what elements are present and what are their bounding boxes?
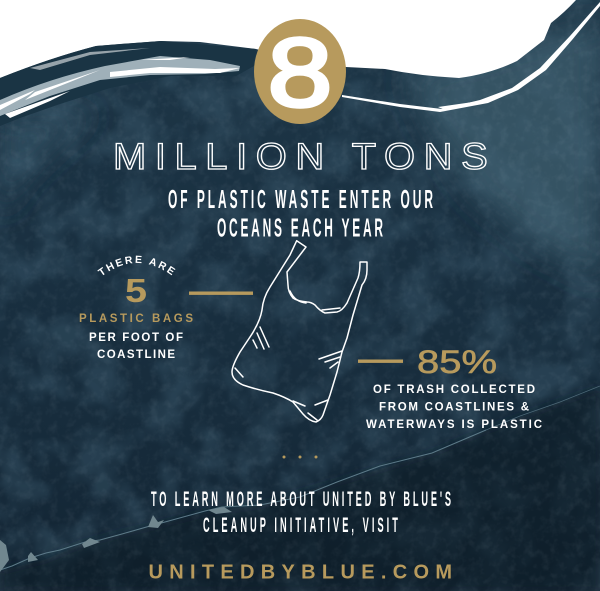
number badge: 8: 8 (268, 18, 332, 127)
call to action text (151, 488, 451, 537)
stat: plastic bags: COASTLINE (97, 349, 175, 361)
subheading: OCEANS EACH YEAR (217, 215, 383, 243)
stat: plastic bags (79, 256, 253, 361)
icon: plastic bag (232, 241, 367, 422)
brush stroke: right (342, 2, 600, 112)
stat: plastic bags: THERE ARE (97, 256, 176, 276)
stat: trash percentage: OF TRASH COLLECTED (373, 384, 535, 396)
heading: million tons: MILLION TONS (113, 136, 488, 178)
brush stroke: left (0, 41, 256, 126)
stat: trash percentage: FROM COASTLINES & (379, 402, 529, 414)
subheading (168, 186, 433, 243)
divider dots (282, 456, 318, 458)
call to action text: CLEANUP INITIATIVE, VISIT (203, 514, 398, 537)
stat: plastic bags: PLASTIC BAGS (79, 313, 193, 325)
stat: trash percentage: 85% (417, 344, 497, 380)
website url: UNITEDBYBLUE.COM (148, 562, 452, 584)
subheading: OF PLASTIC WASTE ENTER OUR (168, 186, 433, 214)
stat: trash percentage (358, 344, 542, 431)
stat: trash percentage: WATERWAYS IS PLASTIC (366, 419, 542, 431)
stat: plastic bags: PER FOOT OF (89, 332, 183, 344)
call to action text: TO LEARN MORE ABOUT UNITED BY BLUE'S (151, 488, 451, 511)
white paper top edge (0, 0, 576, 78)
torn edge line (0, 386, 600, 572)
stat: plastic bags: 5 (125, 272, 147, 309)
